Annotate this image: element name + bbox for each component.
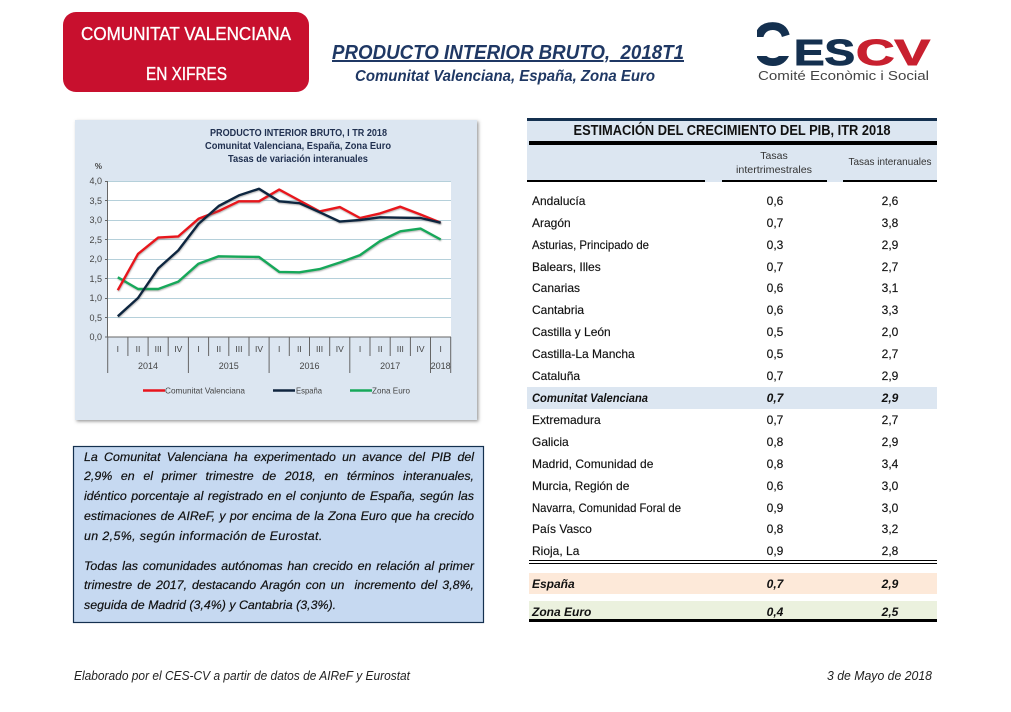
regional rows: 2,6 [882, 194, 899, 208]
regional rows: 0,8 [767, 457, 784, 471]
regional rows: 0,6 [767, 281, 784, 295]
table heading [527, 118, 937, 182]
regional rows: Cantabria [532, 303, 584, 317]
logo: CES-CV: ES [794, 32, 855, 73]
regional rows: 2,7 [882, 347, 899, 361]
regional rows: 3,0 [882, 501, 899, 515]
regional rows: 2,8 [882, 544, 899, 558]
x axis labels: I [197, 344, 200, 354]
y axis labels: 0,0 [89, 332, 102, 342]
regional rows: 3,1 [882, 281, 899, 295]
row: España: 0,7 [767, 577, 785, 591]
legend: Comunitat Valenciana [165, 386, 245, 396]
regional rows: 3,8 [882, 216, 899, 230]
text block: commentary: estimaciones de AIReF, y por encima de la Zona Euro que ha crecido [84, 509, 474, 523]
x axis labels: 2014 [138, 361, 158, 371]
line: Comunitat Valenciana [118, 190, 441, 290]
regional rows: Castilla-La Mancha [532, 347, 635, 361]
y axis labels: 1,0 [89, 293, 102, 303]
title: Comunitat Valenciana, España, Zona Euro [355, 68, 655, 85]
x axis labels: II [378, 344, 382, 354]
x axis labels: 2016 [299, 361, 320, 371]
x axis labels: IV [336, 344, 344, 354]
regional rows: 0,5 [767, 325, 784, 339]
regional rows: Castilla y León [532, 325, 611, 339]
regional rows: Murcia, Región de [532, 479, 630, 493]
regional rows: 3,4 [882, 457, 899, 471]
line: Zona Euro [118, 229, 441, 289]
panel: line chart [75, 120, 477, 420]
row: España: 2,9 [881, 577, 899, 591]
regional rows: 0,8 [767, 435, 784, 449]
x axis labels [117, 344, 451, 371]
column headers: intertrimestrales [736, 164, 812, 176]
column headers: Tasas interanuales [848, 156, 932, 168]
row: Zona Euro: 0,4 [767, 605, 784, 619]
regional rows: 0,8 [767, 522, 784, 536]
regional rows: Madrid, Comunidad de [532, 457, 654, 471]
x axis labels: I [359, 344, 361, 354]
regional rows: 0,9 [767, 544, 784, 558]
regional rows: Asturias, Principado de [532, 238, 649, 252]
x axis labels: III [155, 344, 162, 354]
regional rows: 3,3 [882, 303, 899, 317]
text block: commentary: 2,9% en el primer trimestre de 2018, en términos interanuales, [84, 469, 474, 483]
logo: CES-CV [748, 11, 930, 83]
x axis labels: I [440, 344, 442, 354]
chart title: PRODUCTO INTERIOR BRUTO, I TR 2018 [210, 128, 387, 139]
x axis labels: IV [416, 344, 425, 354]
regional rows: 2,9 [881, 391, 899, 405]
regional rows: 0,3 [767, 238, 784, 252]
text block: commentary [74, 446, 484, 622]
regional rows: Andalucía [532, 194, 586, 208]
footer: date: 3 de Mayo de 2018 [827, 669, 932, 683]
logo: CES-CV: Comité Econòmic i Social [758, 68, 929, 83]
y axis labels: 3,5 [89, 196, 102, 206]
regional rows: Navarra, Comunidad Foral de [532, 501, 681, 515]
legend: España [296, 386, 322, 396]
badge: Comunitat Valenciana en xifres: COMUNITAT VALENCIANA [81, 24, 291, 44]
x axis labels: III [397, 344, 404, 354]
regional rows: Balears, Illes [532, 260, 601, 274]
regional rows: 3,2 [882, 522, 899, 536]
y axis labels: 0,5 [89, 313, 102, 323]
chart title: Comunitat Valenciana, España, Zona Euro [205, 141, 391, 152]
title: PRODUCTO INTERIOR BRUTO, 2018T1 [332, 42, 684, 64]
text block: commentary: seguida de Madrid (3,4%) y Cantabria (3,3%). [84, 598, 336, 612]
x axis labels: II [136, 344, 140, 354]
regional rows: 0,7 [767, 369, 784, 383]
regional rows: 2,9 [882, 238, 899, 252]
regional rows: 2,7 [882, 413, 899, 427]
text block: commentary: Todas las comunidades autónomas han crecido en relación al primer [84, 559, 474, 573]
row: España [532, 577, 899, 591]
regional rows: Comunitat Valenciana [532, 391, 648, 405]
regional rows: 0,6 [767, 479, 784, 493]
text block: commentary: un 2,5%, según información de Eurostat. [84, 529, 323, 543]
x axis labels: IV [174, 344, 183, 354]
regional rows: 0,7 [767, 391, 785, 405]
footer: source: Elaborado por el CES-CV a partir de datos de AIReF y Eurostat [74, 669, 410, 683]
badge: Comunitat Valenciana en xifres [63, 12, 309, 92]
y axis labels: 2,5 [89, 235, 102, 245]
regional rows: Canarias [532, 281, 580, 295]
y axis labels: % [95, 162, 102, 171]
regional rows: 0,7 [767, 260, 784, 274]
regional rows: 0,7 [767, 216, 784, 230]
regional rows: 2,9 [882, 369, 899, 383]
row: Zona Euro: 2,5 [881, 605, 899, 619]
y axis labels: 3,0 [89, 215, 102, 225]
regional rows: 0,5 [767, 347, 784, 361]
text block: commentary: La Comunitat Valenciana ha experimentado un avance del PIB del [84, 450, 474, 464]
regional rows: 0,9 [767, 501, 784, 515]
regional rows: 3,0 [882, 479, 899, 493]
x axis labels: I [278, 344, 280, 354]
column headers: Tasas [760, 150, 788, 162]
line: España [118, 189, 441, 316]
regional rows: 2,0 [882, 325, 899, 339]
regional rows: Extremadura [532, 413, 601, 427]
y axis labels: 2,0 [89, 254, 102, 264]
chart title: Tasas de variación interanuales [228, 154, 368, 165]
x axis labels: 2015 [219, 361, 239, 371]
logo: CES-CV: CV [856, 32, 930, 73]
regional rows: Rioja, La [532, 544, 580, 558]
logo: CES-CV: C [752, 11, 791, 78]
regional rows: Galicia [532, 435, 569, 449]
regional rows: 0,6 [767, 194, 784, 208]
row: Zona Euro [529, 605, 937, 622]
text block: commentary: idéntico porcentaje al registrado en el conjunto de España, según las [84, 489, 474, 503]
x axis labels: IV [255, 344, 263, 354]
y axis labels: 1,5 [89, 274, 102, 284]
axes [105, 181, 451, 373]
regional rows: 2,9 [882, 435, 899, 449]
y axis labels [89, 162, 102, 342]
x axis labels: 2018 [431, 361, 451, 371]
x axis labels: II [297, 344, 302, 354]
x axis labels: II [216, 344, 221, 354]
chart title [205, 128, 391, 165]
panel: table [527, 118, 937, 622]
legend: Zona Euro [372, 386, 410, 396]
regional rows: Cataluña [532, 369, 580, 383]
regional rows: 2,7 [882, 260, 899, 274]
title [332, 42, 684, 85]
table heading: ESTIMACIÓN DEL CRECIMIENTO DEL PIB, ITR 2018 [574, 121, 890, 139]
x axis labels: 2017 [380, 361, 400, 371]
regional rows [529, 194, 937, 564]
regional rows: 0,6 [767, 303, 784, 317]
x axis labels: III [235, 344, 242, 354]
regional rows: País Vasco [532, 522, 592, 536]
row: España: España [532, 577, 575, 591]
y axis labels: 4,0 [89, 176, 102, 186]
highlight row backgrounds [527, 387, 937, 619]
legend [143, 386, 410, 396]
badge: Comunitat Valenciana en xifres: EN XIFRES [146, 64, 227, 84]
column headers [527, 150, 937, 182]
regional rows: Aragón [532, 216, 571, 230]
plot area [108, 181, 451, 337]
x axis labels: III [316, 344, 323, 354]
text block: commentary: trimestre de 2017, destacando Aragón con un incremento del 3,8%, [84, 578, 474, 592]
row: Zona Euro: Zona Euro [531, 605, 591, 619]
regional rows: 0,7 [767, 413, 784, 427]
x axis labels: I [117, 344, 119, 354]
